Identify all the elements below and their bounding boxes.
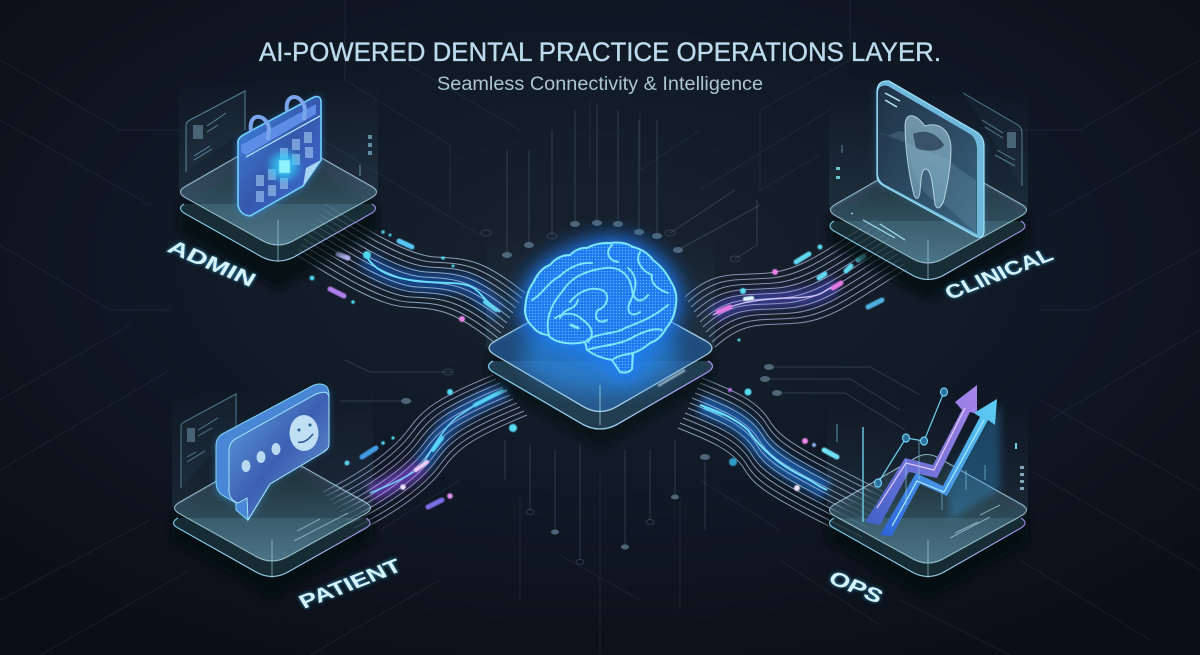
panel: admin <box>179 78 378 290</box>
stream: ops to hub <box>678 378 884 542</box>
label: clinical: CLINICAL <box>941 244 1057 304</box>
icon: tooth x-ray card <box>877 81 984 237</box>
panel: ops <box>827 385 1028 600</box>
label: admin <box>163 236 260 291</box>
stream: admin to hub <box>295 204 525 343</box>
platform: patient <box>172 390 373 598</box>
panel: patient <box>172 384 373 598</box>
label: ops: OPS <box>824 567 887 608</box>
label: ops: OPS <box>824 567 887 608</box>
label: patient: PATIENT <box>295 555 407 613</box>
stream: clinical to hub <box>685 219 907 347</box>
hub platform <box>486 228 715 450</box>
panel: clinical <box>829 81 1028 300</box>
icon: chat bubble <box>216 384 329 520</box>
chart: rising arrows <box>865 385 1000 536</box>
platform: ops <box>827 405 1028 600</box>
label: admin: ADMIN <box>163 236 260 291</box>
subtitle: Seamless Connectivity & Intelligence <box>437 74 763 95</box>
label: patient: PATIENT <box>295 555 407 613</box>
label: admin: ADMIN <box>163 236 260 291</box>
label: clinical: CLINICAL <box>941 244 1057 304</box>
side indicators: ops <box>837 424 1024 522</box>
side screen: clinical <box>836 93 1022 186</box>
circuit nodes around the hub <box>340 105 920 564</box>
stream: patient to hub <box>323 375 527 532</box>
side screen: patient <box>181 394 236 488</box>
panel: central AI hub <box>486 228 715 450</box>
platform: clinical <box>829 90 1028 300</box>
side screen: admin <box>186 91 372 176</box>
icon: calendar <box>238 96 321 216</box>
icon: brain <box>525 242 676 373</box>
platform: admin <box>179 78 378 290</box>
title: AI-POWERED DENTAL PRACTICE OPERATIONS LAYER. <box>259 37 941 67</box>
